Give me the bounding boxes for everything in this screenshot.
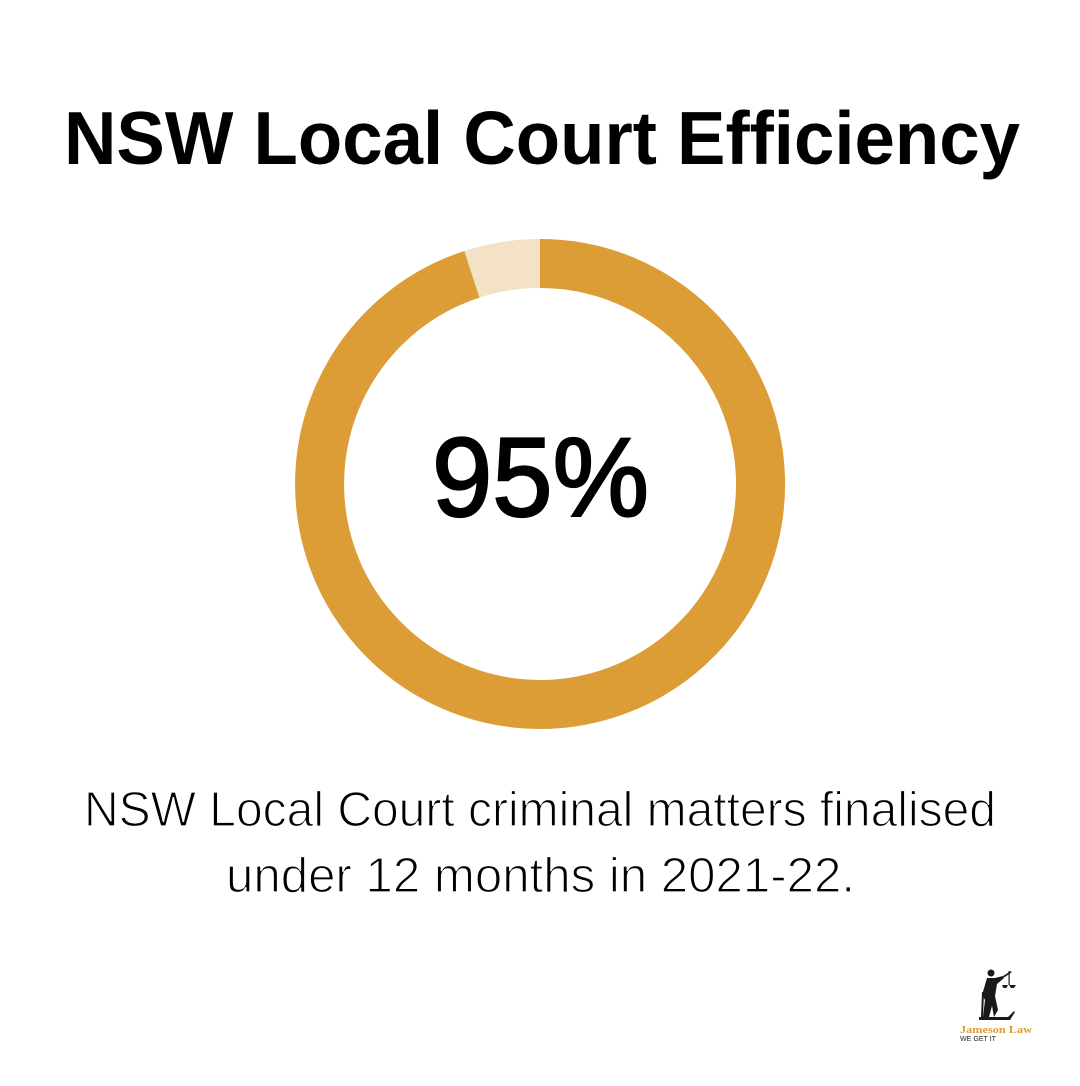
ring segment: 95 percent	[320, 263, 761, 705]
title: NSW Local Court Efficiency	[64, 96, 1020, 180]
icon: lady justice figure	[979, 970, 1016, 1020]
logo name: Jameson Law	[960, 1025, 1032, 1036]
donut chart: 95 percent	[320, 263, 761, 705]
ring segment: remaining 5 percent	[472, 264, 540, 274]
description text: under 12 months in 2021-22.	[226, 849, 855, 903]
logo tagline: WE GET IT	[960, 1036, 997, 1043]
description text	[84, 783, 996, 903]
center value: 95%	[432, 415, 649, 540]
description text: NSW Local Court criminal matters finalised	[84, 783, 996, 837]
logo: Jameson Law	[960, 970, 1032, 1043]
